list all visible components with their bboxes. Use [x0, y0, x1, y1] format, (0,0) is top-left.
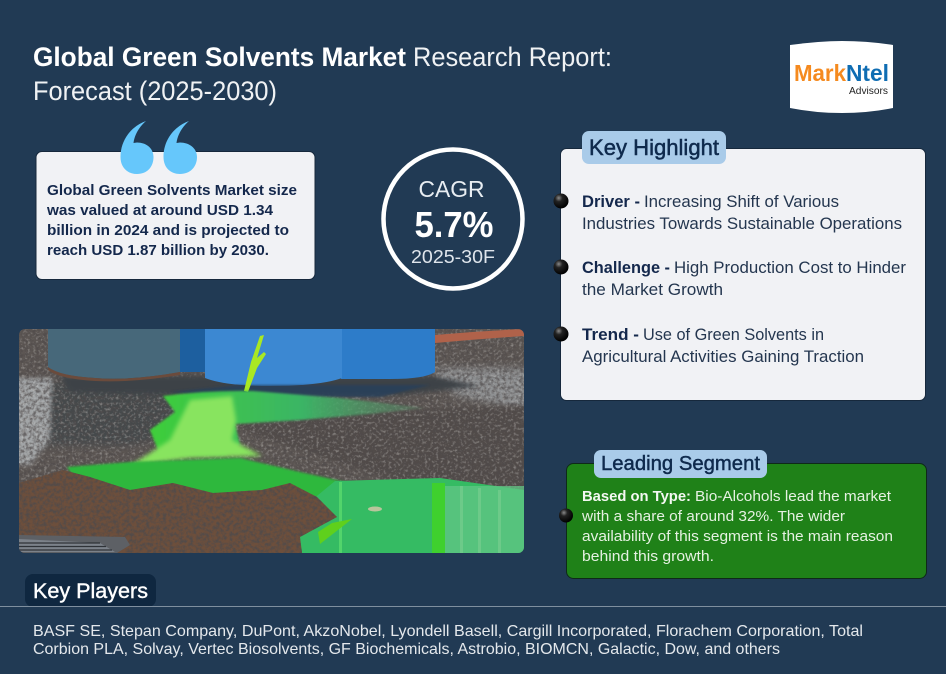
leading segment text: availability of this segment is the main reason — [582, 529, 893, 545]
driver: Increasing Shift of Various — [644, 193, 839, 211]
wet band behind barrels — [60, 376, 480, 395]
driver: Driver - — [582, 193, 640, 211]
key players list: Corbion PLA, Solvay, Vertec Biosolvents, GF Biochemicals, Astrobio, BIOMCN, Galactic, Dow, and others — [33, 641, 780, 658]
key players list: BASF SE, Stepan Company, DuPont, AkzoNobel, Lyondell Basell, Cargill Incorporated, Florachem Corporation, Total — [33, 623, 863, 640]
key highlight heading — [582, 131, 726, 164]
photo: green solvent spill — [15, 329, 530, 553]
leading segment text — [581, 489, 893, 565]
logo: MarkNtel Advisors — [790, 41, 893, 113]
key players heading — [25, 574, 156, 607]
leading segment text: Bio-Alcohols lead the market — [695, 489, 891, 505]
title: Research Report: — [413, 42, 612, 72]
title: Global Green Solvents Market — [33, 42, 406, 72]
CAGR circle: 5.7% — [414, 204, 494, 245]
trend — [554, 326, 864, 366]
panel: leading segment — [559, 450, 926, 578]
title — [33, 42, 612, 106]
leading segment heading: Leading Segment — [601, 453, 760, 475]
icon: quotation marks — [120, 121, 197, 174]
logo: MarkNtel Advisors: Advisors — [849, 85, 888, 97]
trend: Trend - — [582, 326, 639, 344]
leading segment text: behind this growth. — [582, 549, 714, 565]
panel: market size — [36, 152, 315, 280]
CAGR circle: CAGR — [418, 176, 484, 202]
CAGR circle: 2025-30F — [411, 247, 495, 267]
logo: MarkNtel Advisors: Ntel — [846, 60, 889, 86]
key highlight heading: Key Highlight — [589, 135, 719, 160]
ground — [19, 329, 524, 553]
challenge: the Market Growth — [582, 281, 723, 299]
trend: Use of Green Solvents in — [643, 326, 824, 344]
CAGR circle — [384, 150, 522, 288]
barrels — [48, 329, 180, 379]
green stream — [244, 335, 266, 392]
drain grate — [19, 535, 130, 553]
key players list — [33, 623, 863, 658]
leading segment text: Based on Type: — [582, 489, 691, 505]
challenge — [554, 259, 907, 299]
challenge: High Production Cost to Hinder — [674, 259, 907, 277]
driver — [554, 193, 902, 233]
market size text: billion in 2024 and is projected to — [47, 222, 289, 239]
market size text: was valued at around USD 1.34 — [46, 202, 274, 219]
trend: Agricultural Activities Gaining Traction — [582, 348, 864, 366]
logo: MarkNtel Advisors: Mark — [794, 60, 847, 86]
key players heading: Key Players — [33, 580, 148, 603]
leading segment text: with a share of around 32%. The wider — [581, 509, 845, 525]
market size text: reach USD 1.87 billion by 2030. — [47, 242, 269, 259]
dirt pile — [19, 470, 337, 553]
green spill — [150, 391, 425, 455]
panel: key highlight — [554, 131, 926, 400]
challenge: Challenge - — [582, 259, 670, 277]
market size text: Global Green Solvents Market size — [47, 182, 297, 199]
driver: Industries Towards Sustainable Operations — [582, 215, 902, 233]
title: Forecast (2025-2030) — [33, 76, 277, 106]
market size text — [46, 182, 297, 259]
